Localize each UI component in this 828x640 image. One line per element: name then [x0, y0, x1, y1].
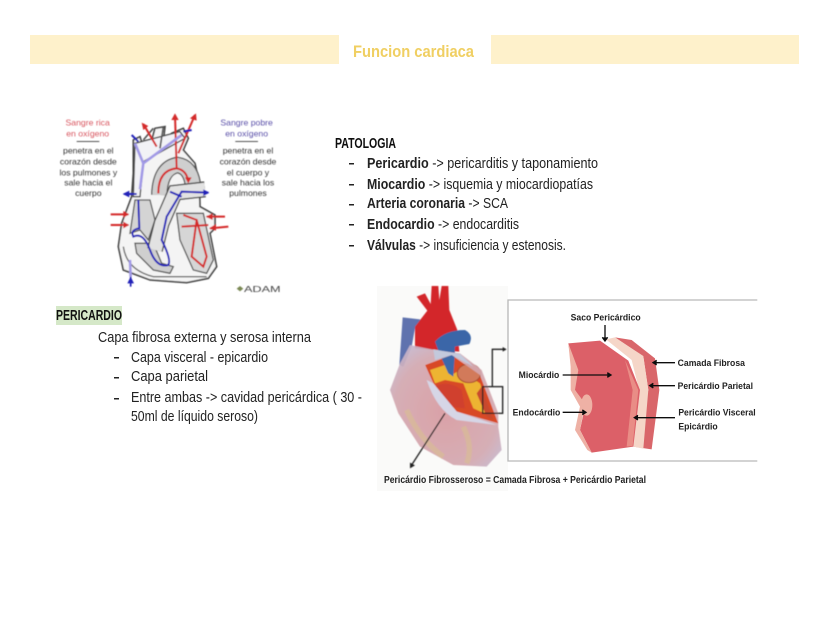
red blood flow — [111, 115, 228, 267]
detail box and arrows — [412, 349, 504, 465]
pathology list: PATOLOGIA — [335, 136, 396, 152]
oxygen-rich label: Sangre rica — [66, 118, 110, 128]
oxygen-rich label — [59, 118, 118, 198]
blue arrowheads — [123, 189, 209, 287]
blue blood flow — [124, 130, 208, 265]
oxygen-rich label: corazón desde — [60, 157, 117, 167]
pericardio description: 50ml de líquido seroso) — [131, 409, 258, 425]
image background — [377, 286, 508, 491]
layer labels: Miocárdio — [519, 370, 560, 380]
great vessels — [399, 286, 471, 377]
layer labels: Pericárdio Visceral — [678, 408, 756, 418]
item: miocardio: Miocardio -> isquemia y miocardiopatías — [367, 177, 593, 193]
pericardio description: Capa visceral - epicardio — [131, 350, 268, 366]
detail panel: pericardium layers — [508, 300, 757, 461]
oxygen-poor label: pulmones — [229, 188, 267, 198]
pericardio heading — [56, 306, 122, 325]
oxygen-rich label: sale hacia el — [64, 178, 112, 188]
item: arteria coronaria: Arteria coronaria -> SCA — [367, 196, 508, 212]
layer labels: Epicárdio — [678, 421, 718, 431]
pericardio description: Capa fibrosa externa y serosa interna — [98, 330, 312, 346]
item: valvulas: Válvulas -> insuficiencia y estenosis. — [367, 238, 566, 254]
item: pericardio: Pericardio -> pericarditis y taponamiento — [367, 156, 598, 172]
pointer arrows — [563, 325, 675, 420]
oxygen-rich label: los pulmones y — [59, 167, 118, 177]
oxygen-poor label: en oxígeno — [225, 129, 268, 139]
oxygen-rich label: en oxígeno — [66, 129, 109, 139]
logo text — [237, 285, 281, 294]
oxygen-rich label: penetra en el — [63, 145, 114, 155]
oxygen-poor label: penetra en el — [223, 145, 273, 155]
oxygen-poor label: corazón desde — [220, 157, 277, 167]
pericardio description: Capa parietal — [131, 369, 208, 385]
layer labels: Camada Fibrosa — [678, 358, 746, 368]
panel frame — [508, 300, 757, 461]
light purple flow — [130, 135, 182, 277]
layer labels: Pericárdio Parietal — [678, 381, 753, 391]
oxygen-rich label: cuerpo — [75, 188, 102, 198]
pathology list — [335, 136, 598, 254]
oxygen-poor label: Sangre pobre — [220, 118, 273, 128]
layer labels: Endocárdio — [513, 408, 561, 418]
layer labels — [513, 312, 756, 431]
layer labels: Saco Pericárdico — [571, 312, 641, 322]
oxygen-poor label: el cuerpo y — [227, 167, 270, 177]
pericardial sac — [390, 345, 502, 467]
tissue layers — [568, 337, 659, 453]
oxygen-poor label: sale hacia los — [222, 178, 275, 188]
item: endocardio: Endocardio -> endocarditis — [367, 217, 519, 233]
oxygen-poor label — [220, 118, 277, 198]
title: Funcion cardiaca — [353, 42, 474, 61]
red arrowheads — [123, 113, 216, 231]
exposed heart — [425, 352, 498, 423]
pericardio description: Entre ambas -> cavidad pericárdica ( 30 - — [131, 390, 362, 406]
diagram: blood flow through the heart — [59, 113, 281, 294]
heart body — [118, 127, 217, 283]
title banner — [30, 35, 799, 64]
illustration caption: Pericárdio Fibrosseroso = Camada Fibrosa + Pericárdio Parietal — [384, 475, 646, 486]
pericardio description — [98, 330, 362, 425]
arrowheads — [410, 347, 507, 468]
illustration: heart in pericardial sac — [390, 286, 507, 468]
pericardio heading: PERICARDIO — [56, 308, 122, 324]
logo text: ADAM — [244, 285, 281, 294]
